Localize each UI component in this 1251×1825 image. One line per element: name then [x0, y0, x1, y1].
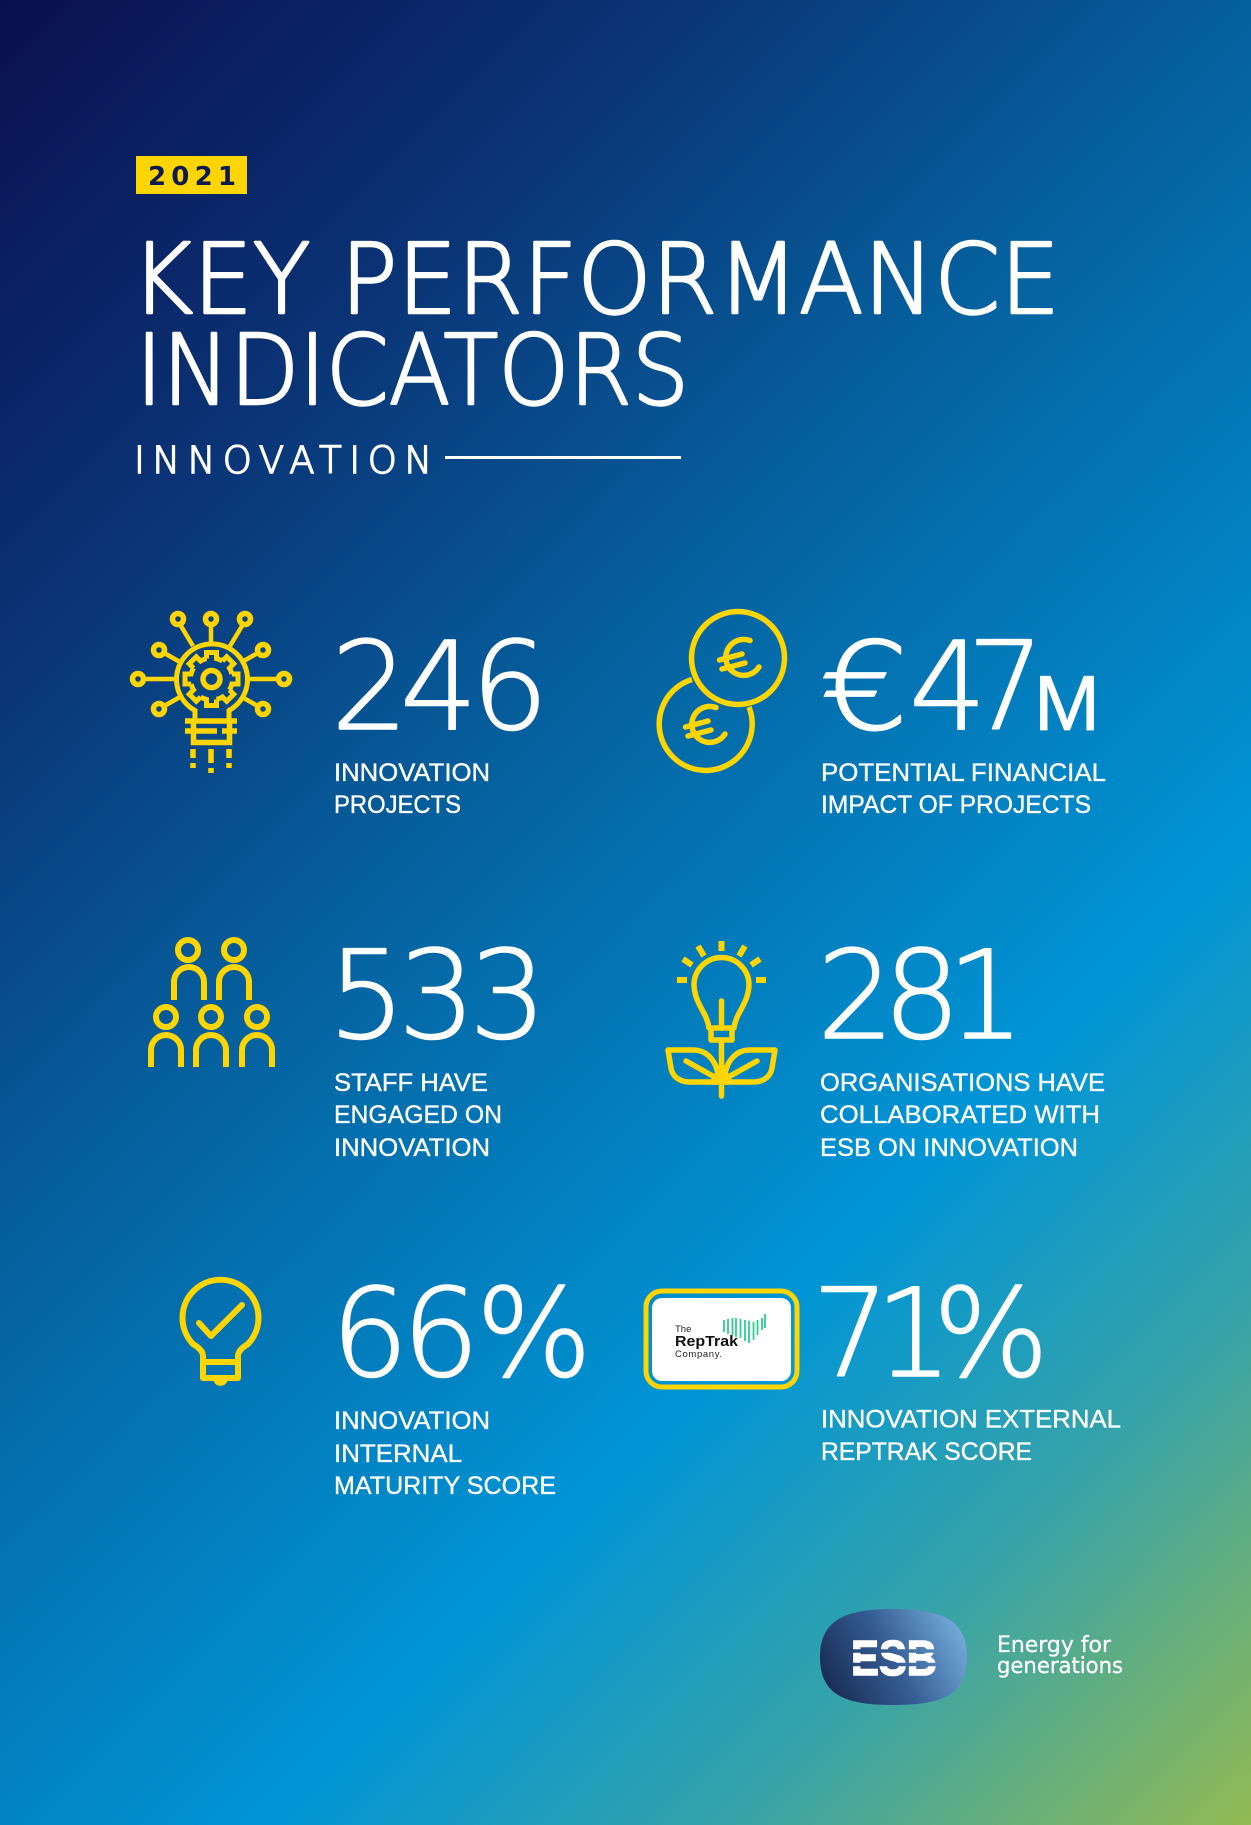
label: organisations collaborated: COLLABORATED WITH	[820, 1101, 1100, 1129]
tagline: generations	[997, 1654, 1123, 1679]
title	[131, 223, 1060, 427]
label: organisations collaborated	[820, 1069, 1105, 1162]
label: staff engaged: ENGAGED ON	[334, 1101, 502, 1129]
year badge	[136, 156, 247, 194]
label: potential financial impact: POTENTIAL FINANCIAL	[821, 759, 1106, 787]
title: KEY PERFORMANCE	[131, 223, 1060, 336]
icon: RepTrak logo badge: The	[675, 1324, 691, 1335]
title: INDICATORS	[136, 314, 689, 427]
tagline: Energy for	[997, 1633, 1112, 1658]
icon: RepTrak logo badge: RepTrak	[675, 1333, 739, 1350]
icon: RepTrak logo badge	[646, 1291, 797, 1387]
label: innovation projects: PROJECTS	[334, 791, 461, 819]
label: external reptrak score: REPTRAK SCORE	[821, 1438, 1032, 1466]
label: organisations collaborated: ORGANISATIONS HAVE	[820, 1069, 1105, 1097]
ESB logo: ESB	[851, 1632, 937, 1686]
value: 47 million euro: M	[1034, 659, 1100, 747]
label: internal maturity score: MATURITY SCORE	[334, 1472, 556, 1500]
label: external reptrak score	[821, 1406, 1121, 1466]
icon: light bulb with check mark	[182, 1280, 258, 1385]
label: staff engaged	[334, 1069, 502, 1162]
icon: light bulb plant	[668, 941, 775, 1096]
panel: innovation projects	[132, 614, 549, 819]
icon: RepTrak logo badge: Company.	[675, 1349, 722, 1360]
panel: organisations collaborated	[668, 925, 1105, 1162]
year badge: 2021	[148, 162, 236, 192]
ESB logo	[820, 1609, 967, 1705]
value: 71%: 71%	[812, 1263, 1049, 1405]
icon: light bulb with gear and circuit nodes	[132, 614, 290, 773]
value: 47 million euro	[820, 616, 1100, 759]
icon: euro coins	[659, 612, 784, 770]
label: organisations collaborated: ESB ON INNOVATION	[820, 1134, 1078, 1162]
value: 47 million euro: 47	[909, 616, 1045, 758]
panel: potential financial impact	[659, 612, 1106, 819]
label: internal maturity score: INNOVATION	[334, 1407, 490, 1435]
value: 533: 533	[328, 925, 547, 1067]
label: potential financial impact: IMPACT OF PROJECTS	[821, 791, 1091, 819]
icon: group of people	[151, 940, 272, 1067]
section heading: innovation	[134, 439, 681, 482]
value: 246: 246	[331, 616, 549, 758]
value: 47 million euro: €	[820, 617, 909, 759]
label: staff engaged: STAFF HAVE	[334, 1069, 488, 1097]
panel: staff engaged	[151, 925, 547, 1162]
label: innovation projects: INNOVATION	[334, 759, 490, 787]
label: external reptrak score: INNOVATION EXTERNAL	[821, 1406, 1121, 1434]
label: potential financial impact	[821, 759, 1106, 819]
section heading: innovation: INNOVATION	[134, 439, 432, 482]
value: 66%: 66%	[331, 1263, 592, 1405]
label: internal maturity score: INTERNAL	[334, 1440, 462, 1468]
label: internal maturity score	[334, 1407, 556, 1500]
panel: internal maturity score	[182, 1263, 592, 1500]
value: 281: 281	[817, 925, 1025, 1067]
label: staff engaged: INNOVATION	[334, 1134, 490, 1162]
tagline	[997, 1633, 1123, 1679]
label: innovation projects	[334, 759, 490, 819]
panel: external reptrak score	[646, 1263, 1121, 1466]
